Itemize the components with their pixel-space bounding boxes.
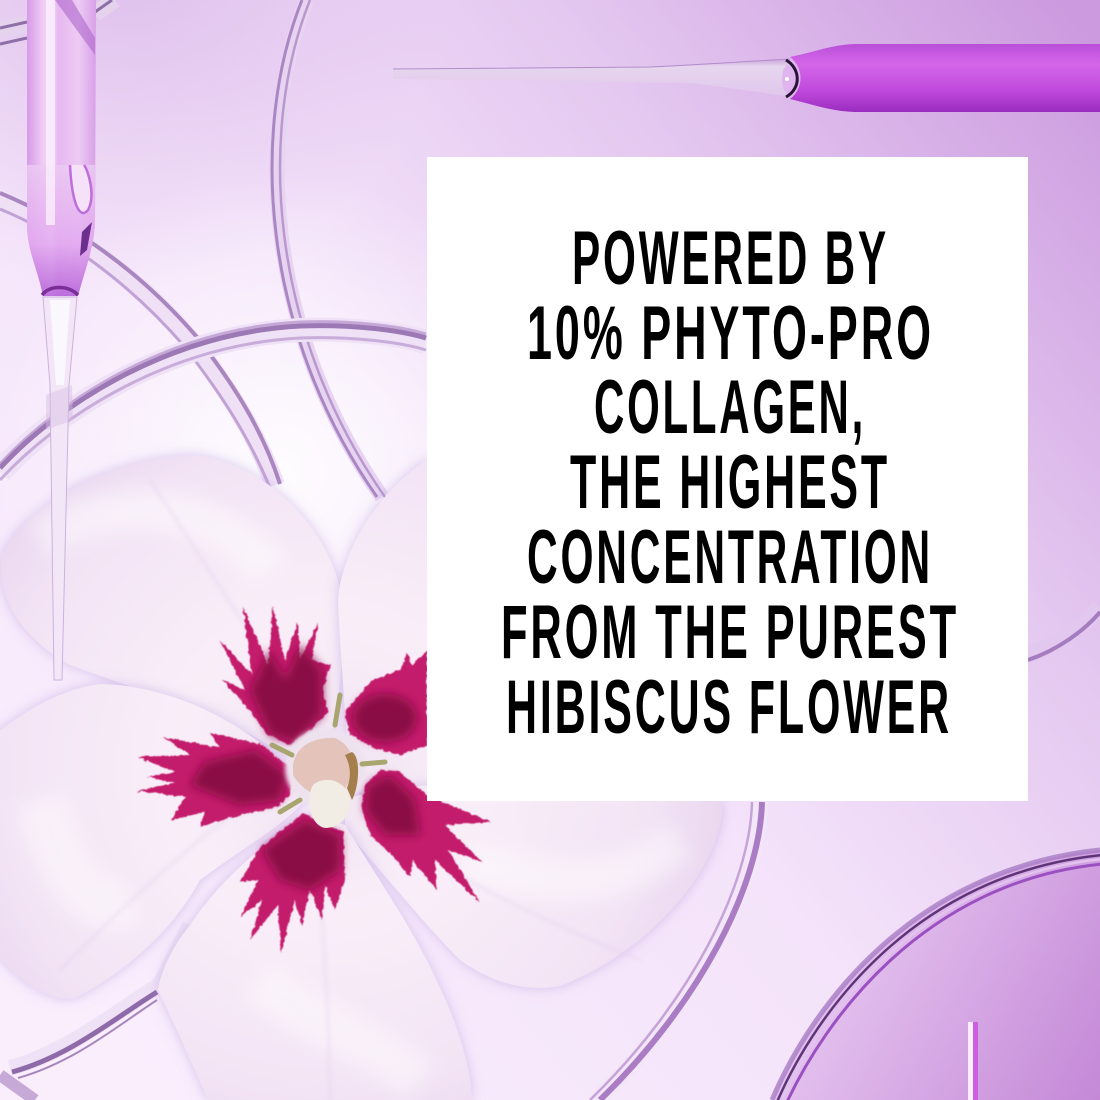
headline: COLLAGEN, bbox=[594, 365, 866, 450]
ring: central dish bbox=[0, 322, 762, 1100]
flower markings bbox=[137, 607, 490, 953]
pipette: top right bbox=[393, 44, 1100, 112]
petal highlights and veins bbox=[40, 480, 680, 1100]
petal: upper left bbox=[1, 455, 343, 775]
petal: left bbox=[0, 684, 305, 999]
marking dark cores bbox=[190, 645, 420, 890]
petal: right bbox=[345, 784, 722, 988]
text panel bbox=[427, 157, 1028, 801]
petal: upper right bbox=[338, 458, 440, 810]
petal: bottom bbox=[158, 815, 472, 1100]
pipette: top left bbox=[27, 0, 96, 680]
ring: upper centre dish bbox=[272, 0, 1100, 660]
dish: bottom right bbox=[772, 850, 1100, 1100]
flower centre bbox=[272, 695, 385, 828]
small pipette stem bbox=[968, 1022, 973, 1100]
headline bbox=[501, 216, 959, 750]
flower bbox=[0, 455, 722, 1100]
ring: upper left dish bbox=[0, 0, 280, 488]
